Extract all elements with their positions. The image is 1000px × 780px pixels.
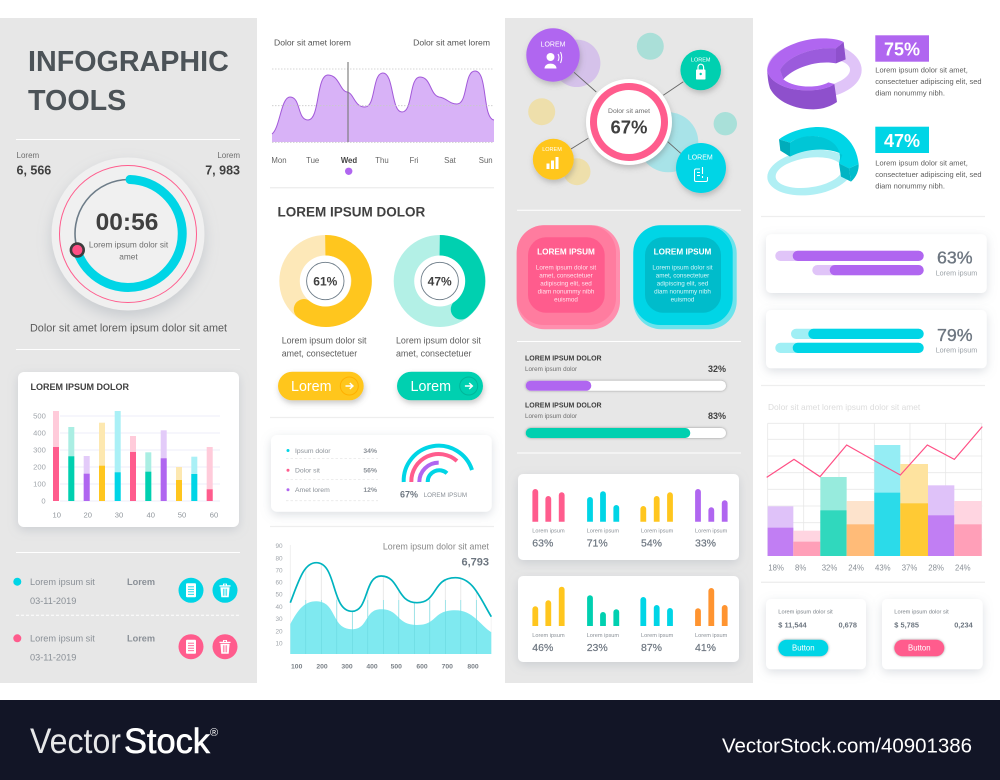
wave chart: 80 xyxy=(275,555,283,562)
donut: 61%: 61% xyxy=(313,274,338,288)
wave chart: 600 xyxy=(416,663,428,670)
card: legend and rainbow gauge: LOREM IPSUM xyxy=(424,492,467,499)
area chart header: Dolor sit amet lorem xyxy=(413,38,490,48)
card: stacked bar chart: 200 xyxy=(33,462,46,472)
card: 79% bars xyxy=(766,310,987,368)
tile: cyan xyxy=(633,225,737,329)
footer banner xyxy=(0,700,1000,780)
card: 63% bars: 63% xyxy=(937,248,973,268)
purple area chart: Wed xyxy=(341,156,357,165)
progress: green xyxy=(525,402,726,438)
list row: cyan: Lorem xyxy=(127,577,155,587)
progress: purple: 32% xyxy=(708,364,726,374)
list row: pink xyxy=(13,634,237,662)
card: stacked bar chart: 20 xyxy=(83,510,92,520)
combo chart labels: 24% xyxy=(848,563,864,572)
card: price pink: Button xyxy=(908,644,931,653)
card: 79% bars: 79% xyxy=(937,325,973,345)
card: price cyan: $ 11,544 xyxy=(778,620,808,629)
card: stacked bar chart: 400 xyxy=(33,428,46,438)
card: legend and rainbow gauge: 67% xyxy=(400,489,418,499)
title xyxy=(28,46,229,117)
card: stacked bar chart: 30 xyxy=(115,510,123,520)
donut: 47% xyxy=(394,235,486,327)
callout: 75% xyxy=(875,35,982,97)
callout: 47%: diam nonummy nibh. xyxy=(875,181,945,190)
tile: cyan: amet, consectetuer xyxy=(656,273,709,280)
card: mini bars row two: Lorem ipsum xyxy=(641,633,674,639)
wave chart: 500 xyxy=(391,663,402,670)
callout: 75%: 75% xyxy=(884,40,920,60)
centre gauge: 67% xyxy=(610,116,648,138)
wave chart: 200 xyxy=(316,663,328,670)
wave chart: 90 xyxy=(275,543,283,550)
card: price pink: Lorem ipsum dolor sit xyxy=(894,609,949,615)
card: mini bars row two: 41% xyxy=(695,642,716,654)
wave chart: 30 xyxy=(275,616,283,623)
wave chart: 100 xyxy=(291,663,303,670)
callout: 47%: consectetuer adipiscing elit, sed xyxy=(875,170,982,179)
card: mini bars row two: 46% xyxy=(532,642,553,654)
wave chart: Lorem ipsum dolor sit amet xyxy=(383,542,490,552)
wave chart: 10 xyxy=(275,640,283,647)
card: mini bars row one: 33% xyxy=(695,538,716,550)
purple area chart: Mon xyxy=(271,156,287,165)
tile: cyan: diam nonummy nibh xyxy=(654,289,711,296)
title: TOOLS xyxy=(28,85,126,117)
title: INFOGRAPHIC xyxy=(28,46,229,78)
caption: Dolor sit amet lorem ipsum dolor sit amet xyxy=(30,322,227,334)
legend rows: Ipsum dolor xyxy=(295,448,331,455)
progress: purple xyxy=(525,355,726,391)
combo chart labels xyxy=(768,563,971,572)
donut captions: amet, consectetuer xyxy=(282,349,357,359)
timer dial: Lorem ipsum dolor sit xyxy=(89,240,169,250)
stat: right: 7, 983 xyxy=(205,164,240,178)
card: stacked bar chart: 10 xyxy=(52,510,61,520)
card: price pink: 0,234 xyxy=(954,620,974,629)
tile: pink: Lorem ipsum dolor sit xyxy=(536,265,596,272)
progress: green: 83% xyxy=(708,411,726,421)
combo chart labels: 24% xyxy=(955,563,971,572)
combo chart labels: 37% xyxy=(902,563,917,572)
card: stacked bar chart: 40 xyxy=(146,510,155,520)
rainbow gauge xyxy=(404,446,472,482)
node: yellow: LOREM xyxy=(542,147,562,153)
card: mini bars row one: 63% xyxy=(532,538,553,550)
card: price pink: $ 5,785 xyxy=(894,620,919,629)
wave chart: 300 xyxy=(341,663,353,670)
wave chart: 40 xyxy=(275,604,283,611)
wave chart: 800 xyxy=(467,663,479,670)
card: mini bars row one: Lorem ipsum xyxy=(695,529,728,535)
tile: cyan: Lorem ipsum dolor sit xyxy=(652,265,713,272)
node: cyan xyxy=(676,143,726,193)
tile: cyan: adipiscing elit, sed xyxy=(657,281,709,288)
card: mini bars row two: 87% xyxy=(641,642,662,654)
logo wordmark: ® xyxy=(210,727,218,739)
list row: pink: 03-11-2019 xyxy=(30,652,76,662)
stat: left: Lorem xyxy=(16,151,40,160)
tile: cyan: LOREM IPSUM xyxy=(654,248,712,256)
card: stacked bar chart: 0 xyxy=(41,496,46,506)
timer dial: 00:56 xyxy=(96,209,158,236)
combo chart: bars and line xyxy=(767,423,982,556)
node: green: LOREM xyxy=(691,58,711,64)
combo chart labels: 32% xyxy=(822,563,837,572)
logo wordmark: Vector xyxy=(30,722,121,761)
card: mini bars row one: Lorem ipsum xyxy=(532,529,565,535)
timer dial xyxy=(52,158,204,310)
card: mini bars row two: 23% xyxy=(587,642,608,654)
card: 63% bars: Lorem ipsum xyxy=(936,269,977,278)
stat: right xyxy=(205,151,240,178)
tile: cyan: euismod xyxy=(671,297,695,304)
purple area chart: Sat xyxy=(444,156,457,165)
node: yellow xyxy=(533,139,574,180)
panel: fourth column xyxy=(761,35,987,669)
node: green xyxy=(680,50,721,90)
card: mini bars row one: Lorem ipsum xyxy=(641,529,674,535)
icon: purple 3D ring xyxy=(767,38,862,109)
purple area chart: Sun xyxy=(479,156,493,165)
card: price pink xyxy=(882,599,983,669)
callout: 47%: Lorem ipsum dolor sit amet, xyxy=(875,159,968,168)
donut captions: amet, consectetuer xyxy=(396,349,472,359)
legend rows: Dolor sit xyxy=(295,468,320,475)
combo chart labels: 28% xyxy=(928,563,944,572)
list row: cyan: 03-11-2019 xyxy=(30,596,76,606)
callout: 47%: 47% xyxy=(884,131,920,151)
donut: 61% xyxy=(279,235,371,327)
progress: green: Lorem ipsum dolor xyxy=(525,413,577,420)
card: mini bars row one: Lorem ipsum xyxy=(587,529,619,535)
tile: pink: diam nonummy nibh xyxy=(538,289,595,296)
combo chart labels: 8% xyxy=(795,563,806,572)
bubble network xyxy=(526,28,737,193)
tile: pink: euismod xyxy=(554,297,578,304)
wave chart: 50 xyxy=(275,592,283,599)
card: price cyan: Button xyxy=(792,644,815,653)
card: stacked bar chart: 100 xyxy=(33,480,46,488)
card: mini bars row two: Lorem ipsum xyxy=(587,633,619,639)
button: yellow xyxy=(278,372,364,400)
wave chart: 70 xyxy=(275,568,283,575)
purple area chart: Tue xyxy=(306,156,319,165)
panel: second column xyxy=(270,38,494,670)
legend rows: 12% xyxy=(363,487,377,494)
card: 79% bars: Lorem ipsum xyxy=(936,346,977,355)
button: green xyxy=(397,372,483,400)
stat: left xyxy=(16,151,51,178)
card: stacked bar chart: 50 xyxy=(178,510,186,520)
combo chart labels: 18% xyxy=(768,563,784,572)
icon: cyan 3D ring xyxy=(767,127,859,195)
purple area chart: Fri xyxy=(409,156,419,165)
card: mini bars row one: 54% xyxy=(641,538,662,550)
wave chart: 6,793 xyxy=(461,556,489,568)
button: green: Lorem xyxy=(410,379,451,395)
card: price cyan: Lorem ipsum dolor sit xyxy=(778,609,833,615)
button: yellow: Lorem xyxy=(291,379,332,395)
tile: pink: adipiscing elit, sed xyxy=(540,281,592,288)
wave chart: 700 xyxy=(442,663,453,670)
card: stacked bar chart xyxy=(18,372,239,527)
list row: cyan: Lorem ipsum sit xyxy=(30,577,95,587)
legend rows xyxy=(286,448,378,501)
callout: 75%: Lorem ipsum dolor sit amet, xyxy=(875,66,968,75)
image id: VectorStock.com/40901386 xyxy=(722,736,972,758)
card: stacked bar chart: 500 xyxy=(33,412,46,420)
tile: pink xyxy=(517,225,620,329)
wave chart: 20 xyxy=(275,628,283,635)
centre gauge xyxy=(586,79,672,165)
area chart header xyxy=(274,38,490,48)
wave chart: 60 xyxy=(275,580,283,587)
chart heading: Dolor sit amet lorem ipsum dolor sit amet xyxy=(768,402,921,412)
progress: green: LOREM IPSUM DOLOR xyxy=(525,402,602,409)
purple area chart: Thu xyxy=(375,156,389,165)
card: legend and rainbow gauge xyxy=(271,435,492,512)
card: mini bars row one: 71% xyxy=(587,538,608,550)
panel: left column xyxy=(0,18,257,683)
callout: 75%: consectetuer adipiscing elit, sed xyxy=(875,77,982,86)
card: mini bars row two: Lorem ipsum xyxy=(532,633,565,639)
tile: pink: LOREM IPSUM xyxy=(537,248,595,256)
callout: 75%: diam nonummy nibh. xyxy=(875,88,945,97)
card: mini bars row two: Lorem ipsum xyxy=(695,633,728,639)
timer dial: amet xyxy=(119,252,138,262)
node: purple: LOREM xyxy=(541,42,566,48)
card: mini bars row one xyxy=(518,474,739,560)
legend rows: 34% xyxy=(363,448,377,455)
card: price cyan: 0,678 xyxy=(838,620,857,629)
progress: purple: LOREM IPSUM DOLOR xyxy=(525,355,602,362)
progress: purple: Lorem ipsum dolor xyxy=(525,366,577,373)
card: 63% bars xyxy=(766,234,987,293)
logo wordmark: Stock xyxy=(124,722,210,761)
wave chart: 400 xyxy=(366,663,378,670)
card: stacked bar chart: LOREM IPSUM DOLOR xyxy=(30,382,129,392)
logo wordmark xyxy=(30,722,218,761)
legend rows: Amet lorem xyxy=(295,487,330,494)
donut: 47%: 47% xyxy=(428,274,452,288)
stat: right: Lorem xyxy=(217,151,240,160)
donut captions xyxy=(282,335,481,359)
heading: LOREM IPSUM DOLOR xyxy=(278,205,425,220)
callout: 47% xyxy=(875,127,982,190)
panel: third column xyxy=(505,18,753,683)
card: price cyan xyxy=(766,599,866,669)
purple area chart xyxy=(271,62,494,175)
card: stacked bar chart: 60 xyxy=(210,510,218,520)
list row: cyan xyxy=(13,577,237,606)
wave chart xyxy=(275,542,491,670)
list row: pink: Lorem ipsum sit xyxy=(30,634,95,644)
card: stacked bar chart: 300 xyxy=(33,446,46,454)
legend rows: 56% xyxy=(363,468,377,475)
centre gauge: Dolor sit amet xyxy=(608,108,650,115)
tile: pink: amet, consectetuer xyxy=(539,273,593,280)
node: purple xyxy=(526,28,580,82)
combo chart labels: 43% xyxy=(875,563,891,572)
list row: pink: Lorem xyxy=(127,634,155,644)
stat: left: 6, 566 xyxy=(16,164,51,178)
node: cyan: LOREM xyxy=(688,154,713,161)
donut captions: Lorem ipsum dolor sit xyxy=(396,335,481,345)
area chart header: Dolor sit amet lorem xyxy=(274,38,351,48)
card: mini bars row two xyxy=(518,576,739,662)
donut captions: Lorem ipsum dolor sit xyxy=(282,335,367,345)
